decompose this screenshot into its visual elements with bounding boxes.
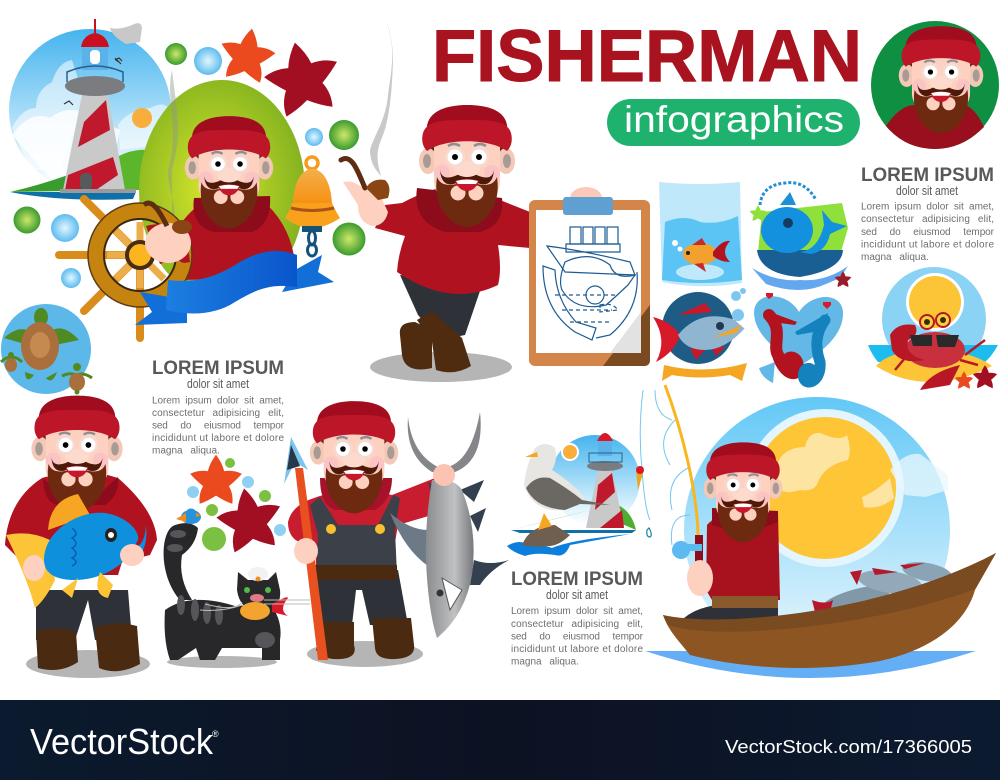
icon: goldfish in bag [659, 182, 742, 286]
text block: right: dolor sit amet [896, 184, 958, 198]
bell [285, 157, 340, 256]
badge: turtles [1, 304, 92, 394]
text block: lower centre: LOREM IPSUM [511, 568, 643, 590]
smoke [370, 20, 393, 176]
decorative starfish and bubbles: cat scene [187, 455, 287, 554]
text block: right: sed do eiusmod tempor [861, 227, 995, 238]
fishing rod [655, 385, 713, 596]
title: FISHERMAN [432, 16, 862, 97]
text block: left: dolor sit amet [187, 377, 249, 391]
text block: right: LOREM IPSUM [861, 164, 994, 186]
icon: whale [750, 183, 851, 290]
text block: left: consectetur adipisicing elit, [152, 408, 284, 419]
text block: right: consectetur adipisicing elit, [861, 214, 994, 225]
text block: lower centre: sed do eiusmod tempor [511, 632, 644, 642]
icon: orange starfish top [216, 24, 279, 84]
text block: lower centre: consectetur adipisicing elit, [511, 619, 643, 630]
footer bar: VectorStock.com/17366005 [725, 736, 972, 757]
fishing float and line [636, 390, 651, 537]
character: fisherman with pipe and clipboard [341, 20, 530, 382]
badge: fisherman portrait on green [871, 21, 999, 149]
big blue fish [6, 494, 146, 608]
character: fisherman in overalls with harpoon and shark [284, 401, 509, 667]
icon: dark red starfish top [258, 35, 346, 119]
text block: right: incididunt ut labore et dolore [861, 240, 994, 250]
text block: lower centre: incididunt ut labore et dolore [511, 644, 643, 655]
ribbon [135, 292, 187, 325]
subtitle pill [607, 99, 860, 146]
ship wheel [59, 199, 192, 338]
text block: lower centre [511, 568, 644, 668]
illustration: fisherman in boat [645, 385, 996, 678]
shark [390, 412, 509, 638]
text block: left: magna aliqua. [152, 446, 220, 456]
text block: right: magna aliqua. [861, 252, 929, 263]
harpoon [284, 437, 328, 660]
text block: lower centre: dolor sit amet [546, 588, 608, 602]
illustration: lighthouse scene [9, 19, 171, 200]
illustration: fisherman portrait with wheel, bell and ribbon [59, 70, 340, 338]
footer bar [0, 700, 1000, 780]
icon: seahorses in heart [754, 293, 843, 383]
footer bar: VectorStock [30, 721, 214, 762]
icon: crab with sunglasses [868, 267, 998, 390]
text block: left: sed do eiusmod tempor [152, 420, 285, 432]
text block: lower centre: magna aliqua. [511, 656, 579, 668]
text block: left [152, 357, 285, 456]
fish pile [812, 559, 953, 616]
text block: right: Lorem ipsum dolor sit amet, [861, 202, 994, 212]
text block: right [861, 164, 995, 263]
text block: left: Lorem ipsum dolor sit amet, [152, 396, 284, 406]
text block: lower centre: Lorem ipsum dolor sit amet, [511, 606, 643, 617]
decorative bubbles: top left [14, 43, 366, 288]
text block: left: incididunt ut labore et dolore [152, 433, 284, 444]
character: black cat with bird and fish [164, 508, 310, 668]
boat [663, 553, 996, 668]
footer bar: ® [212, 729, 219, 739]
text block: left: LOREM IPSUM [152, 357, 284, 379]
subtitle pill: infographics [624, 99, 844, 140]
icon: angler fish [653, 288, 747, 381]
character: fisherman holding big blue fish [5, 396, 157, 678]
clipboard with line-art ship [529, 187, 650, 366]
illustration: seagull and lighthouse [507, 433, 640, 556]
